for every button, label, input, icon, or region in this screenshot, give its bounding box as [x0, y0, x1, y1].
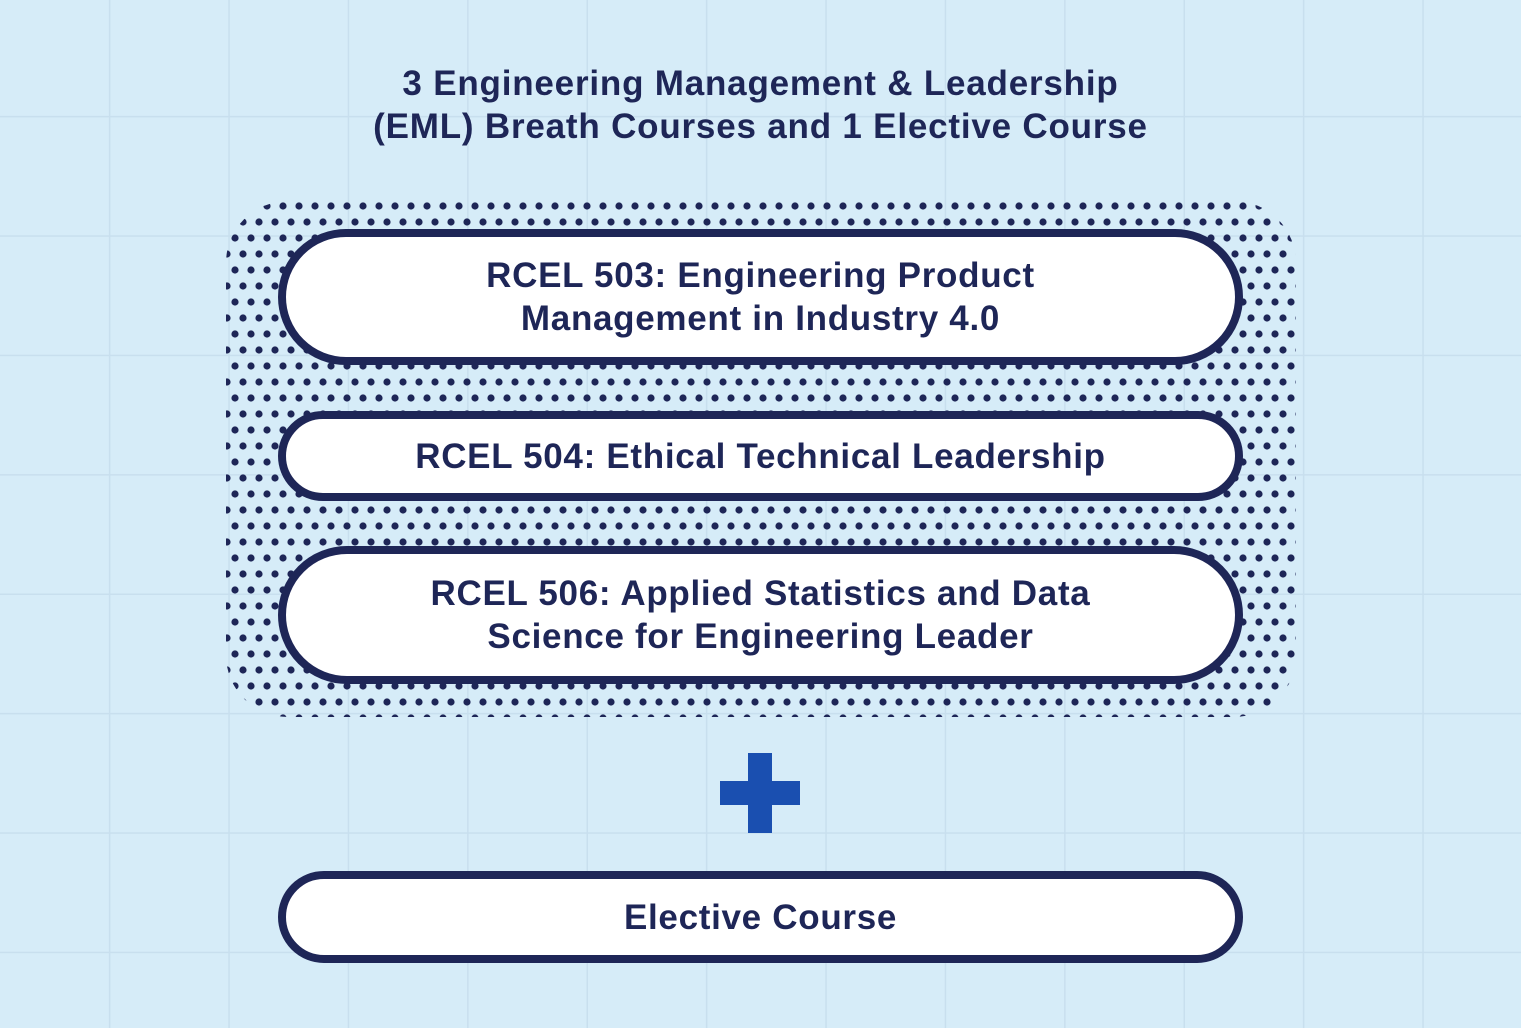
pill: RCEL 503	[278, 229, 1243, 365]
pill: elective course	[278, 871, 1243, 963]
pill: RCEL 506: RCEL 506: Applied Statistics and Data	[431, 574, 1090, 613]
title: (EML) Breath Courses and 1 Elective Course	[373, 107, 1148, 146]
title: 3 Engineering Management & Leadership	[402, 64, 1119, 103]
pill: RCEL 506: Science for Engineering Leader	[487, 617, 1034, 656]
icon: plus	[720, 753, 800, 833]
pill: RCEL 506	[278, 546, 1243, 684]
title	[373, 64, 1148, 146]
pill: elective course: Elective Course	[624, 898, 897, 936]
pill: RCEL 504	[278, 411, 1243, 501]
pill: RCEL 504: RCEL 504: Ethical Technical Leadership	[415, 436, 1106, 476]
pill: RCEL 503: Management in Industry 4.0	[521, 299, 1000, 338]
dotted backdrop	[226, 201, 1296, 717]
pill: RCEL 503: RCEL 503: Engineering Product	[486, 256, 1035, 295]
